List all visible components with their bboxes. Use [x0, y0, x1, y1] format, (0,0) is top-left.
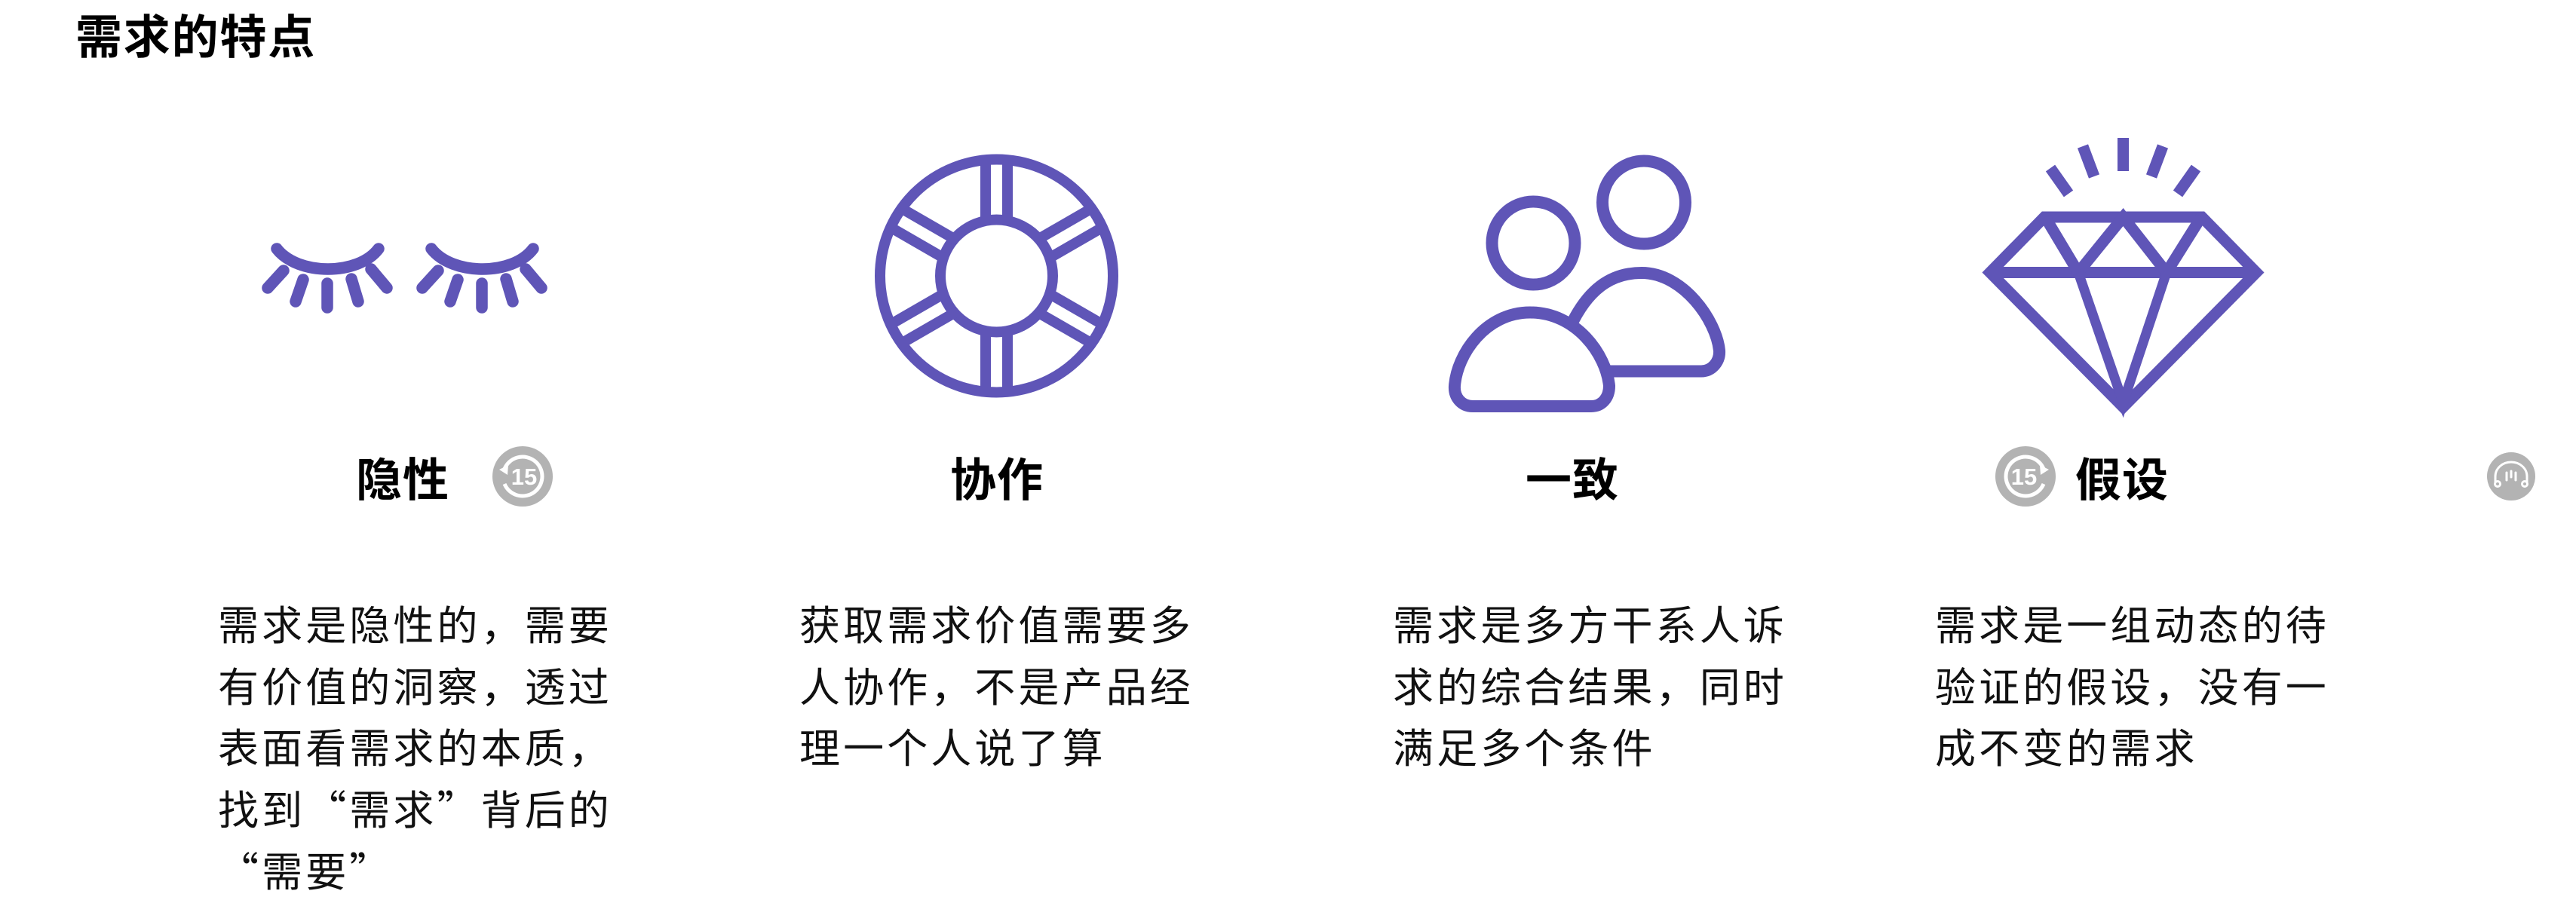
icon: forward 15 seconds badge	[1995, 446, 2056, 507]
text: 隐性 description	[218, 592, 612, 898]
text: 隐性 description: 需求是隐性的，需要	[218, 592, 612, 652]
text: 假设 description: 成不变的需求	[1935, 715, 2198, 775]
text: 假设 description: 需求是一组动态的待	[1935, 592, 2329, 652]
text: 一致 description: 需求是多方干系人诉	[1393, 592, 1787, 652]
text: 协作 description: 人协作，不是产品经	[799, 654, 1194, 714]
panel: 一致	[1393, 155, 1787, 775]
panel: 隐性	[218, 243, 612, 898]
title: 需求的特点	[75, 0, 316, 67]
panel: 协作	[799, 154, 1194, 775]
heading: 隐性: 隐性	[356, 442, 449, 510]
text: 隐性 description: 找到“需求”背后的	[218, 777, 612, 837]
text: 隐性 description: “需要”	[218, 839, 393, 898]
heading: 协作: 协作	[950, 442, 1044, 510]
text: 一致 description: 满足多个条件	[1393, 715, 1656, 775]
icon: lifebuoy	[875, 154, 1118, 398]
icon: headphones badge	[2487, 452, 2535, 501]
text: 隐性 description: 表面看需求的本质，	[218, 715, 612, 775]
icon: replay 15 seconds badge: 15	[511, 464, 537, 490]
text: 协作 description: 理一个人说了算	[799, 715, 1106, 775]
heading: 假设: 假设	[2075, 442, 2169, 510]
icon: replay 15 seconds badge	[492, 446, 553, 507]
text: 隐性 description: 有价值的洞察，透过	[218, 654, 612, 714]
icon: closed eyes	[262, 243, 547, 314]
heading: 一致: 一致	[1526, 442, 1619, 510]
text: 协作 description	[799, 592, 1194, 775]
text: 假设 description: 验证的假设，没有一	[1935, 654, 2329, 714]
icon: diamond	[1982, 138, 2264, 418]
text: 一致 description: 求的综合结果，同时	[1393, 654, 1787, 714]
text: 协作 description: 获取需求价值需要多	[799, 592, 1194, 652]
panel: 假设	[1935, 138, 2329, 775]
icon: two people	[1448, 155, 1725, 412]
icon: forward 15 seconds badge: 15	[2011, 464, 2037, 490]
text: 一致 description	[1393, 592, 1787, 775]
text: 假设 description	[1935, 592, 2329, 775]
